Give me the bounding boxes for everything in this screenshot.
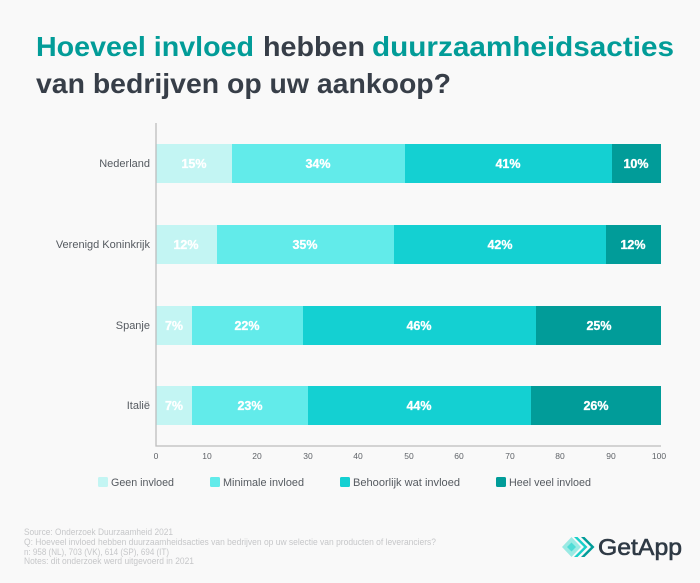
logo: GetApp [562,534,682,560]
row: Verenigd Koninkrijk [56,225,661,264]
source notes: Source: Onderzoek Duurzaamheid 2021 [24,527,173,537]
row: Verenigd Koninkrijk: 12% [173,238,199,252]
row: Verenigd Koninkrijk: 35% [292,238,318,252]
row: Spanje: 22% [234,319,260,333]
source notes: Q: Hoeveel invloed hebben duurzaamheidsacties van bedrijven op uw selectie van producten of leveranciers? [24,537,436,547]
x axis labels: 20 [252,451,262,461]
x axis labels: 90 [606,451,616,461]
title [36,31,674,99]
x axis labels: 40 [353,451,363,461]
legend: Behoorlijk wat invloed [353,477,460,489]
row: Italië: 26% [583,399,609,413]
legend: Minimale invloed [223,477,304,489]
row: Nederland: 15% [181,157,207,171]
row: Verenigd Koninkrijk: 42% [487,238,513,252]
x axis labels: 30 [303,451,313,461]
row: Italië [127,386,661,425]
row: Verenigd Koninkrijk: 12% [620,238,646,252]
row: Spanje: Spanje [116,320,150,332]
logo: GetApp: GetApp [598,534,682,560]
x axis labels: 100 [652,451,666,461]
source notes [24,527,436,566]
title: duurzaamheidsacties [372,31,674,62]
x axis labels: 60 [454,451,464,461]
x axis labels: 80 [555,451,565,461]
x axis labels: 70 [505,451,515,461]
source notes: Notes: dit onderzoek werd uitgevoerd in 2021 [24,556,194,566]
row: Verenigd Koninkrijk: Verenigd Koninkrijk [56,239,150,251]
legend: Heel veel invloed [509,477,591,489]
row: Nederland: 34% [305,157,331,171]
x axis labels: 50 [404,451,414,461]
x axis labels: 10 [202,451,212,461]
row: Italië: 7% [165,399,183,413]
x axis labels [154,451,666,461]
row: Spanje [116,306,661,345]
legend [98,477,591,489]
row: Nederland [99,144,661,183]
title: van bedrijven op uw aankoop? [36,68,451,99]
row: Nederland: Nederland [99,158,150,170]
legend: Geen invloed [111,477,174,489]
stacked bar chart [56,123,666,461]
row: Spanje: 46% [406,319,432,333]
source notes: n: 958 (NL), 703 (VK), 614 (SP), 694 (IT) [24,547,169,557]
row: Spanje: 7% [165,319,183,333]
row: Italië: 44% [406,399,432,413]
x axis labels: 0 [154,451,159,461]
row: Nederland: 41% [495,157,521,171]
row: Spanje: 25% [586,319,612,333]
row: Italië: Italië [127,400,150,412]
row: Italië: 23% [237,399,263,413]
title: hebben [263,31,365,62]
row: Nederland: 10% [623,157,649,171]
title: Hoeveel invloed [36,31,254,62]
